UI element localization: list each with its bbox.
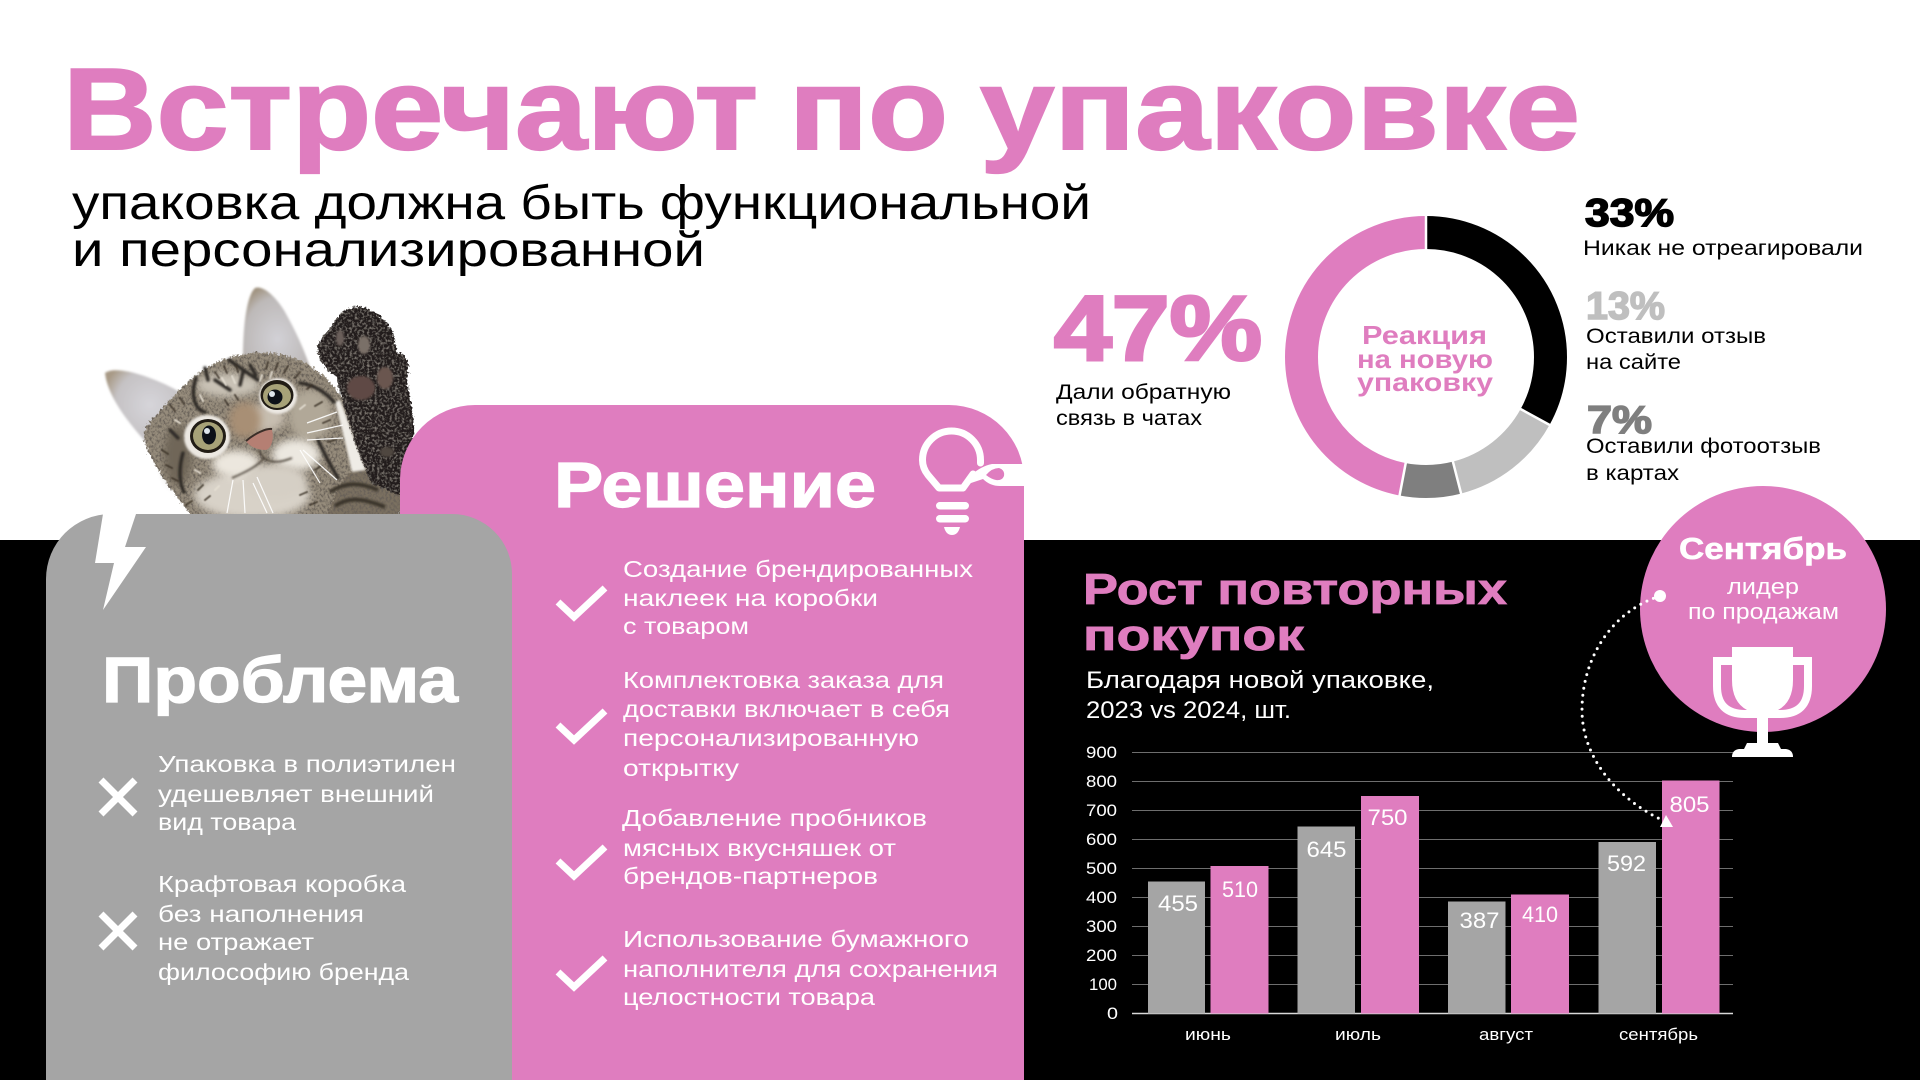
subtitle: [72, 177, 1091, 277]
problem item 1: [101, 751, 456, 835]
stat: 13 percent: 13%: [1586, 285, 1665, 328]
solution item 3: [558, 805, 927, 889]
y axis labels: 600: [1086, 831, 1117, 849]
problem item 2: не отражает: [158, 929, 314, 955]
problem item 1: вид товара: [158, 809, 297, 835]
stat: 13 percent: Оставили отзыв: [1586, 324, 1766, 348]
donut centre label: Реакция: [1362, 320, 1487, 350]
stat: 7 percent: в картах: [1586, 461, 1679, 485]
solution item 2: персонализированную: [623, 725, 919, 751]
stat: 33 percent: Никак не отреагировали: [1583, 236, 1863, 260]
title: Встречают: [63, 44, 758, 174]
y axis labels: 200: [1086, 947, 1117, 965]
bar chart: 2023 vs 2024: [1086, 744, 1733, 1044]
chart subtitle: Благодаря новой упаковке,: [1086, 667, 1434, 694]
solution item 2: доставки включает в себя: [623, 696, 950, 722]
x axis labels: сентябрь: [1619, 1026, 1698, 1044]
stat: 13 percent: [1586, 285, 1766, 374]
stat: 47 percent: Дали обратную: [1056, 380, 1231, 404]
donut chart: reaction to new packaging: [1302, 214, 1551, 498]
donut centre label: на новую: [1357, 344, 1493, 374]
solution item 2: открытку: [623, 755, 739, 781]
chart heading: repeat purchases growth: Рост повторных: [1083, 565, 1508, 614]
stat: 47 percent: 47%: [1054, 278, 1262, 380]
bars: june: [1148, 866, 1268, 1014]
bars: august: [1448, 894, 1569, 1014]
arrow: dotted from callout to september bar: [1582, 590, 1673, 827]
y axis labels: 0: [1107, 1005, 1118, 1023]
solution item 1: Создание брендированных: [623, 556, 973, 582]
solution item 1: [558, 556, 973, 639]
bars: july: 645: [1306, 837, 1346, 862]
stat: 13 percent: на сайте: [1586, 350, 1681, 374]
heading: problem: Проблема: [102, 644, 458, 716]
stat: 7 percent: 7%: [1587, 399, 1652, 442]
x axis labels: август: [1479, 1026, 1533, 1044]
panel: solution: [400, 405, 1025, 1080]
x axis labels: июнь: [1185, 1026, 1231, 1044]
y axis labels: 900: [1086, 744, 1117, 762]
y axis labels: 500: [1086, 860, 1117, 878]
bars: september: [1598, 780, 1720, 1014]
callout: september leader: [1640, 486, 1886, 757]
bars: june: 510: [1222, 877, 1258, 902]
stat: 7 percent: Оставили фотоотзыв: [1586, 434, 1821, 458]
donut centre label: [1357, 320, 1494, 397]
bars: september: 805: [1670, 792, 1710, 817]
y axis labels: 800: [1086, 773, 1117, 791]
y axis labels: 400: [1086, 889, 1117, 907]
callout: september leader: лидер: [1727, 574, 1799, 599]
chart heading: repeat purchases growth: покупок: [1083, 611, 1305, 660]
illustration: kitten waving paw: [105, 287, 414, 519]
bars: august: 387: [1460, 908, 1500, 933]
subtitle: и персонализированной: [72, 224, 705, 277]
stat: 47 percent: связь в чатах: [1056, 406, 1202, 430]
problem item 2: [101, 871, 410, 985]
callout: september leader: по продажам: [1688, 599, 1839, 624]
solution item 4: [558, 926, 998, 1010]
solution item 4: наполнителя для сохранения: [623, 956, 998, 982]
title: по: [789, 44, 948, 174]
y axis labels: 100: [1089, 976, 1117, 994]
icon: light bulb: [922, 431, 1025, 535]
bars: september: 592: [1607, 851, 1646, 876]
solution item 3: Добавление пробников: [622, 805, 927, 831]
solution item 1: наклеек на коробки: [623, 585, 878, 611]
solution item 3: мясных вкусняшек от: [623, 835, 896, 861]
bars: june: 455: [1158, 891, 1198, 916]
stat: 33 percent: [1583, 192, 1863, 260]
panel: problem: [46, 514, 512, 1080]
bars: july: 750: [1368, 805, 1408, 830]
title: [63, 44, 1580, 174]
problem item 2: Крафтовая коробка: [158, 871, 407, 897]
subtitle: упаковка должна быть функциональной: [72, 177, 1091, 230]
solution item 2: [558, 667, 950, 781]
chart subtitle: [1086, 667, 1434, 724]
stat: 7 percent: [1586, 399, 1821, 485]
solution item 4: целостности товара: [623, 984, 876, 1010]
y axis labels: 300: [1086, 918, 1117, 936]
problem item 1: удешевляет внешний: [158, 781, 434, 807]
problem item 1: Упаковка в полиэтилен: [158, 751, 456, 777]
stat: 47 percent: [1054, 278, 1262, 430]
problem item 2: без наполнения: [158, 901, 364, 927]
problem item 2: философию бренда: [158, 959, 410, 985]
callout: september leader: Сентябрь: [1679, 531, 1847, 566]
stat: 33 percent: 33%: [1585, 192, 1674, 235]
y axis labels: [1086, 744, 1118, 1023]
y axis labels: 700: [1086, 802, 1117, 820]
chart subtitle: 2023 vs 2024, шт.: [1086, 697, 1291, 724]
solution item 4: Использование бумажного: [623, 926, 969, 952]
bars: august: 410: [1522, 902, 1558, 927]
title: упаковке: [980, 44, 1580, 174]
solution item 3: брендов-партнеров: [623, 863, 878, 889]
x axis labels: июль: [1335, 1026, 1381, 1044]
icon: trophy: [1717, 647, 1808, 757]
heading: solution: Решение: [554, 449, 876, 521]
chart heading: repeat purchases growth: [1083, 565, 1508, 660]
solution item 2: Комплектовка заказа для: [623, 667, 944, 693]
black lower background band: [0, 540, 1920, 1080]
bars: july: [1298, 796, 1419, 1014]
icon: lightning bolt: [95, 514, 146, 610]
donut centre label: упаковку: [1357, 367, 1494, 397]
solution item 1: с товаром: [623, 613, 749, 639]
x axis labels: [1185, 1026, 1698, 1044]
